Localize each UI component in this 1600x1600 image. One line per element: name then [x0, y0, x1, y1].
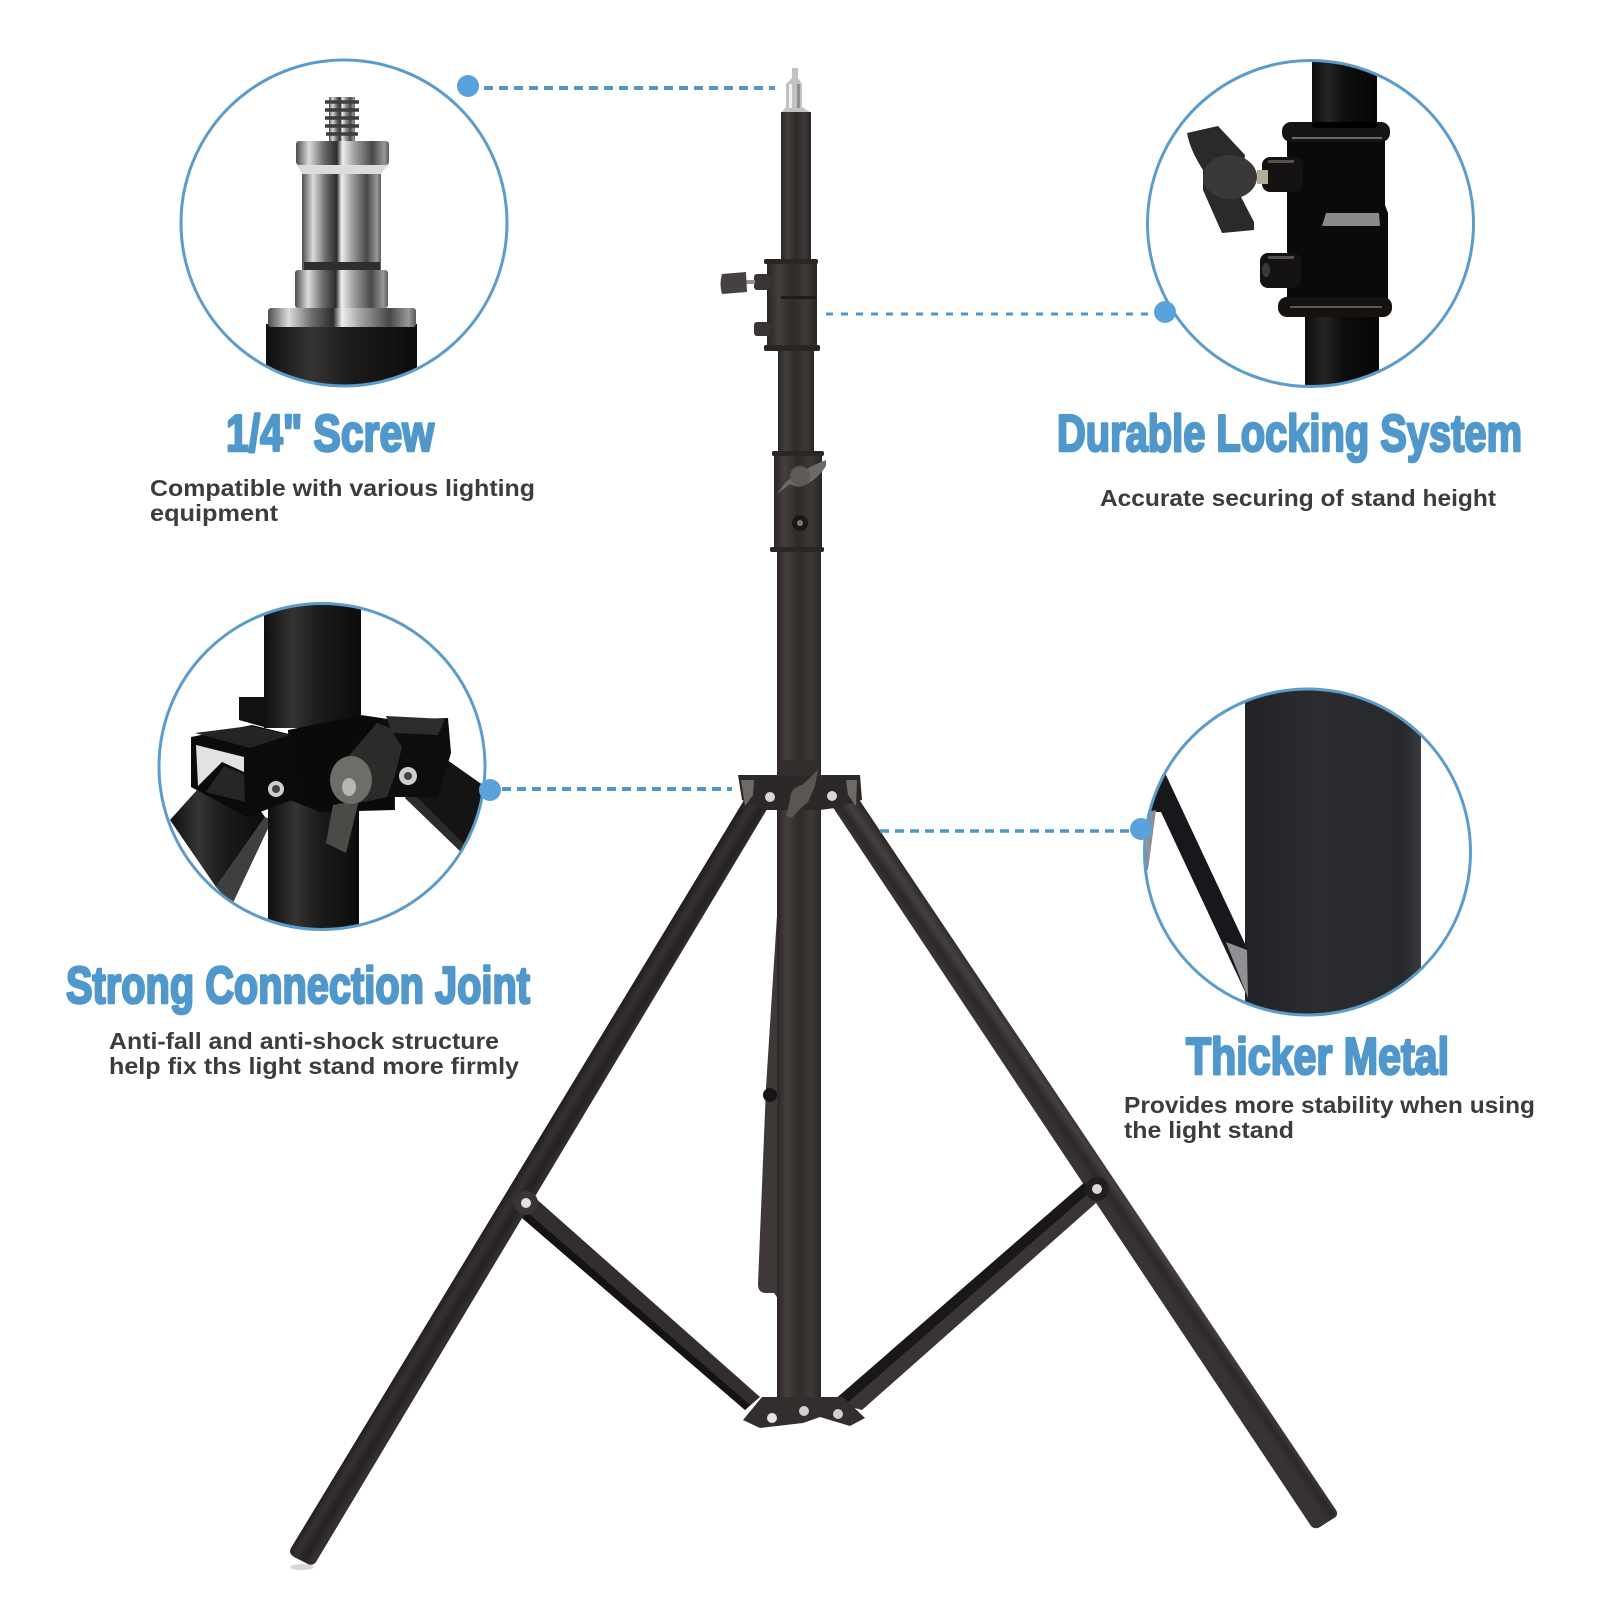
left leg — [290, 782, 769, 1565]
right brace — [832, 1177, 1109, 1410]
lower lock collar — [770, 451, 826, 552]
bottom hub — [743, 1397, 865, 1428]
left leg — [170, 790, 265, 887]
upper pole — [264, 600, 361, 728]
upper lock collar — [720, 259, 820, 351]
silver spigot — [782, 68, 810, 112]
screw thread — [325, 97, 359, 141]
upper boss — [1262, 157, 1303, 192]
back leg — [758, 900, 779, 1300]
circle outline — [1144, 689, 1470, 1015]
bottom ring — [1278, 297, 1392, 317]
circle outline — [159, 604, 485, 930]
description: screw: equipment — [150, 500, 278, 526]
left foot shadow — [290, 1564, 314, 1570]
panel: connection joint detail circle — [159, 600, 490, 935]
description: thicker metal: Provides more stability when using — [1124, 1092, 1535, 1118]
heading: thicker metal: Thicker Metal — [1186, 1028, 1449, 1086]
leader line: locking system — [826, 312, 1158, 316]
left bracket — [191, 725, 300, 817]
description: thicker metal — [1124, 1092, 1535, 1143]
heading: connection joint: Strong Connection Joint — [66, 957, 530, 1015]
thick pole — [1245, 680, 1421, 1025]
left sliver — [1145, 810, 1156, 870]
lower boss — [1260, 253, 1301, 288]
leader line: connection joint — [502, 787, 732, 791]
main pole lower section — [777, 550, 821, 1398]
right leg — [405, 761, 481, 851]
description: screw: Compatible with various lighting — [150, 475, 535, 501]
dot: thicker metal — [1130, 818, 1152, 840]
main pole middle section — [778, 350, 814, 454]
back bracket — [239, 697, 264, 727]
leader line: thicker metal — [880, 829, 1130, 833]
wing knob — [326, 723, 402, 853]
flange underside — [297, 165, 388, 174]
right leg — [832, 786, 1337, 1528]
upper flange — [296, 141, 389, 165]
light stand — [290, 68, 1337, 1570]
right leg highlight — [405, 797, 464, 851]
thin leg — [1148, 773, 1248, 998]
collar body — [1287, 135, 1388, 305]
description: locking system: Accurate securing of stand height — [1100, 485, 1496, 511]
top ring — [1282, 122, 1390, 142]
top hub — [738, 760, 862, 818]
description: connection joint: help fix ths light stand more firmly — [109, 1053, 519, 1079]
panel: screw detail circle — [181, 60, 507, 394]
dot: connection joint — [479, 779, 501, 801]
collar lip highlight — [1322, 213, 1380, 226]
lower flange — [295, 270, 388, 308]
leader line: screw — [484, 86, 775, 90]
back left leg — [216, 817, 268, 902]
panel: locking system detail circle — [1148, 55, 1474, 395]
dot: locking system — [1154, 301, 1176, 323]
black tube — [266, 324, 417, 384]
description: thicker metal: the light stand — [1124, 1117, 1294, 1143]
shaft shadow ring — [304, 262, 380, 270]
circle outline — [181, 60, 507, 386]
knob stud — [1257, 170, 1268, 184]
right bracket — [382, 716, 451, 797]
bolts — [268, 767, 417, 797]
panel: thicker metal detail circle — [1144, 680, 1470, 1025]
heading: screw: 1/4" Screw — [226, 405, 434, 463]
lower pole — [1305, 317, 1379, 385]
lower pole — [268, 800, 359, 935]
description: connection joint — [109, 1028, 519, 1079]
wing knob — [1187, 126, 1257, 233]
leg highlight — [1226, 942, 1248, 998]
silver base ring — [268, 308, 416, 327]
left brace — [514, 1191, 760, 1410]
upper pole — [1312, 62, 1377, 122]
shaft — [302, 172, 381, 270]
description: connection joint: Anti-fall and anti-shock structure — [109, 1028, 499, 1054]
dot: screw — [457, 75, 479, 97]
central hub — [288, 715, 395, 812]
circle outline — [1148, 60, 1474, 386]
main pole top section — [781, 112, 811, 262]
description: screw — [150, 475, 535, 526]
